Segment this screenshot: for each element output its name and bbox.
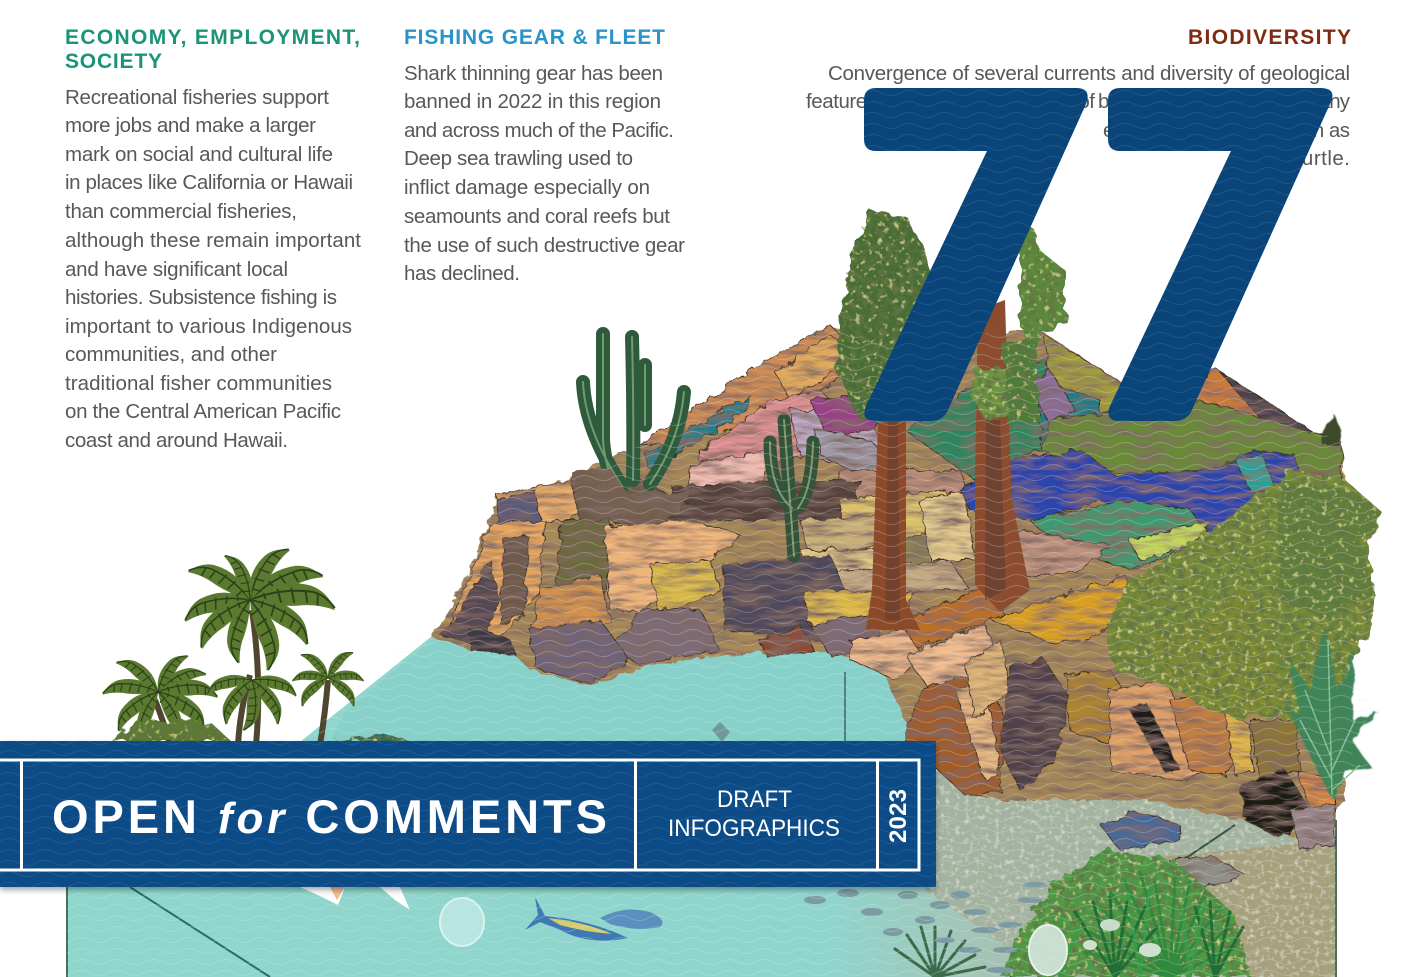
column: economy, employment, society [65,26,361,452]
marine life [300,722,1161,975]
column: fishing gear and fleet [404,26,685,285]
text block: economy paragraph: than commercial fisheries, [65,200,297,223]
text block: economy paragraph: Recreational fisheries support [65,86,329,109]
banner: open for comments [0,741,936,887]
heading: economy, employment, society: ECONOMY, EMPLOYMENT, [65,26,360,49]
banner subtitle: DRAFT [717,786,792,813]
text block: fishing gear paragraph: the use of such destructive gear [404,234,685,257]
text block: economy paragraph: important to various Indigenous [65,315,352,338]
text block: biodiversity paragraph: biodiversity and home to many [1098,90,1351,113]
right vegetation [1105,470,1385,760]
text block: economy paragraph: coast and around Hawaii. [65,429,288,452]
heading: biodiversity: BIODIVERSITY [1188,26,1351,49]
heading: fishing gear and fleet: FISHING GEAR & FLEET [404,26,665,49]
land mass base [432,325,1345,840]
text block: economy paragraph: more jobs and make a larger [65,114,316,137]
banner year: 2023 [885,789,912,843]
mountain patches [640,325,1342,650]
heading: economy, employment, society [65,26,360,73]
page number: 77 [864,88,1332,421]
text block: fishing gear paragraph: Shark thinning gear has been [404,62,663,85]
text block: fishing gear paragraph [404,62,685,285]
text block: economy paragraph: traditional fisher communities [65,372,332,395]
banner subtitle [668,786,840,842]
text block: fishing gear paragraph: has declined. [404,262,520,285]
left cliff patches [440,478,925,683]
text block: biodiversity paragraph: Convergence of several currents and diversity of geological [828,62,1350,85]
wave texture over illustration [67,332,1378,976]
text block: economy paragraph: although these remain important [65,229,361,252]
text block: fishing gear paragraph: seamounts and coral reefs but [404,205,670,228]
text block: biodiversity paragraph [806,62,1351,170]
text block: economy paragraph: communities, and other [65,343,277,366]
text block: biodiversity paragraph: sea turtle. [1255,147,1350,170]
small tree on ridge [1322,412,1342,445]
tree: right conifer [970,220,1065,612]
text block: fishing gear paragraph: banned in 2022 in this region [404,90,661,113]
cactus: small [770,420,813,556]
text block: fishing gear paragraph: inflict damage especially on [404,176,650,199]
text block: biodiversity paragraph: features give rise to high levels of [806,90,1095,113]
text block: fishing gear paragraph: Deep sea trawling used to [404,147,633,170]
text block: biodiversity paragraph: endangered species such as [1103,119,1350,142]
water and seabed [67,620,1336,977]
banner title: OPEN for COMMENTS [52,790,607,843]
rock under cactus [570,468,690,517]
text block: economy paragraph: on the Central American Pacific [65,400,341,423]
text block: economy paragraph: histories. Subsistence fishing is [65,286,337,309]
palm trees [102,539,412,745]
text block: economy paragraph: in places like California or Hawaii [65,171,353,194]
text block: economy paragraph [65,86,361,452]
fern [1285,630,1378,800]
text block: fishing gear paragraph: and across much of the Pacific. [404,119,674,142]
cactus: large [583,334,684,488]
tree: left conifer [835,210,935,630]
illustration: coastal ecosystem [67,200,1400,977]
heading: economy, employment, society: SOCIETY [65,50,162,73]
banner subtitle: INFOGRAPHICS [668,815,840,842]
sea grass [895,850,1250,977]
text block: economy paragraph: and have significant local [65,258,288,281]
column: biodiversity [806,26,1351,170]
text block: economy paragraph: mark on social and cultural life [65,143,333,166]
right cliff patches [905,625,1335,888]
